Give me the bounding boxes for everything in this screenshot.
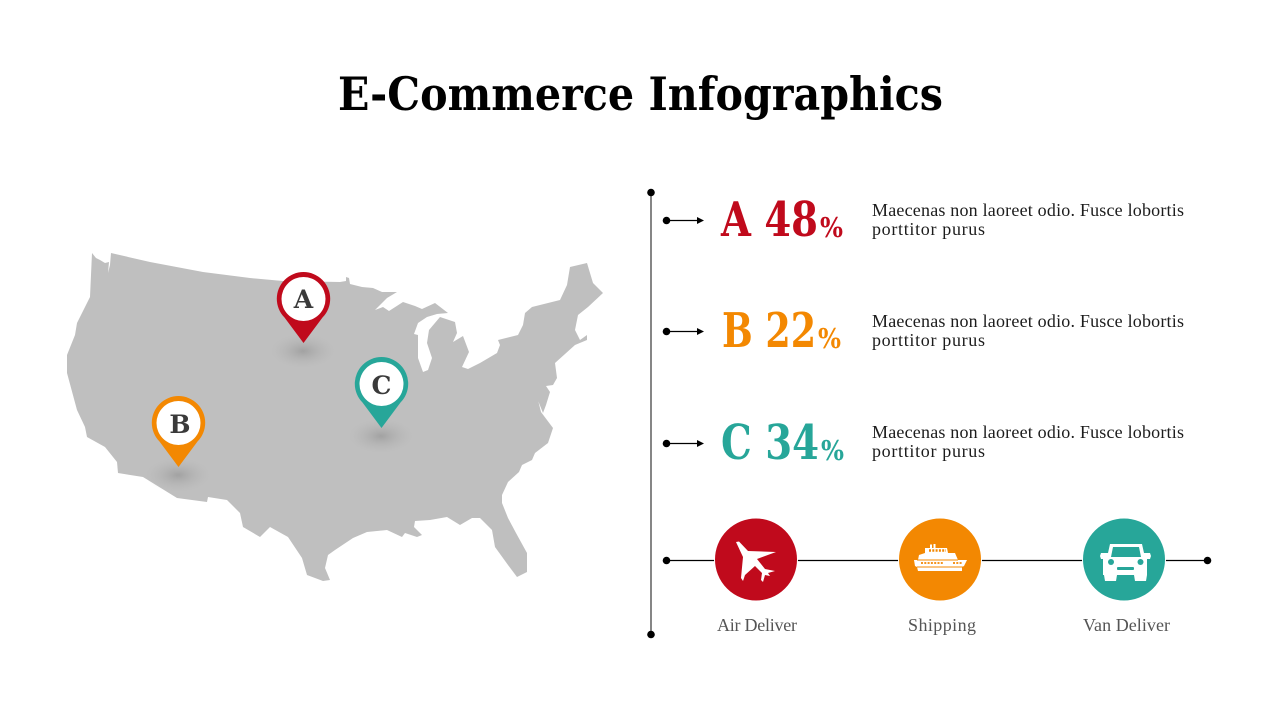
description A: Maecenas non laoreet odio. Fusce lobortis bbox=[872, 200, 1184, 220]
map pin B: B bbox=[169, 410, 191, 439]
map pin A: A bbox=[293, 285, 314, 314]
description B bbox=[872, 311, 1184, 350]
map pin B bbox=[152, 396, 205, 467]
map pin A bbox=[277, 272, 330, 343]
pin shadow B bbox=[146, 458, 210, 492]
arrow A bbox=[663, 217, 704, 224]
description C bbox=[872, 422, 1184, 461]
icon: airplane bbox=[714, 518, 798, 601]
pin shadow A bbox=[271, 334, 335, 368]
icon: van bbox=[1082, 518, 1166, 601]
stat B 22%: B 22 bbox=[722, 303, 816, 359]
stat A 48%: A 48 bbox=[720, 192, 818, 248]
arrow C bbox=[663, 440, 704, 447]
description C: Maecenas non laoreet odio. Fusce lobortis bbox=[872, 422, 1184, 442]
map of the United States bbox=[67, 253, 603, 581]
label: Van Deliver: Van Deliver bbox=[1083, 615, 1170, 635]
title: E-Commerce Infographics bbox=[338, 67, 943, 121]
label: Air Deliver: Air Deliver bbox=[717, 615, 797, 635]
description A bbox=[872, 200, 1184, 239]
icon: ship bbox=[898, 518, 982, 601]
vertical timeline bbox=[647, 189, 655, 638]
description C: porttitor purus bbox=[872, 441, 985, 461]
description A: porttitor purus bbox=[872, 219, 985, 239]
map pin C bbox=[355, 357, 408, 428]
stat C 34%: % bbox=[821, 436, 844, 467]
stat C 34%: C 34 bbox=[721, 415, 819, 471]
stat B 22%: % bbox=[818, 324, 841, 355]
delivery line bbox=[663, 557, 1211, 564]
description B: Maecenas non laoreet odio. Fusce lobortis bbox=[872, 311, 1184, 331]
description B: porttitor purus bbox=[872, 330, 985, 350]
pin shadow C bbox=[349, 419, 413, 453]
arrow B bbox=[663, 328, 704, 335]
label: Shipping: Shipping bbox=[908, 615, 976, 635]
map pin C: C bbox=[372, 371, 391, 400]
stat A 48%: % bbox=[820, 213, 843, 244]
